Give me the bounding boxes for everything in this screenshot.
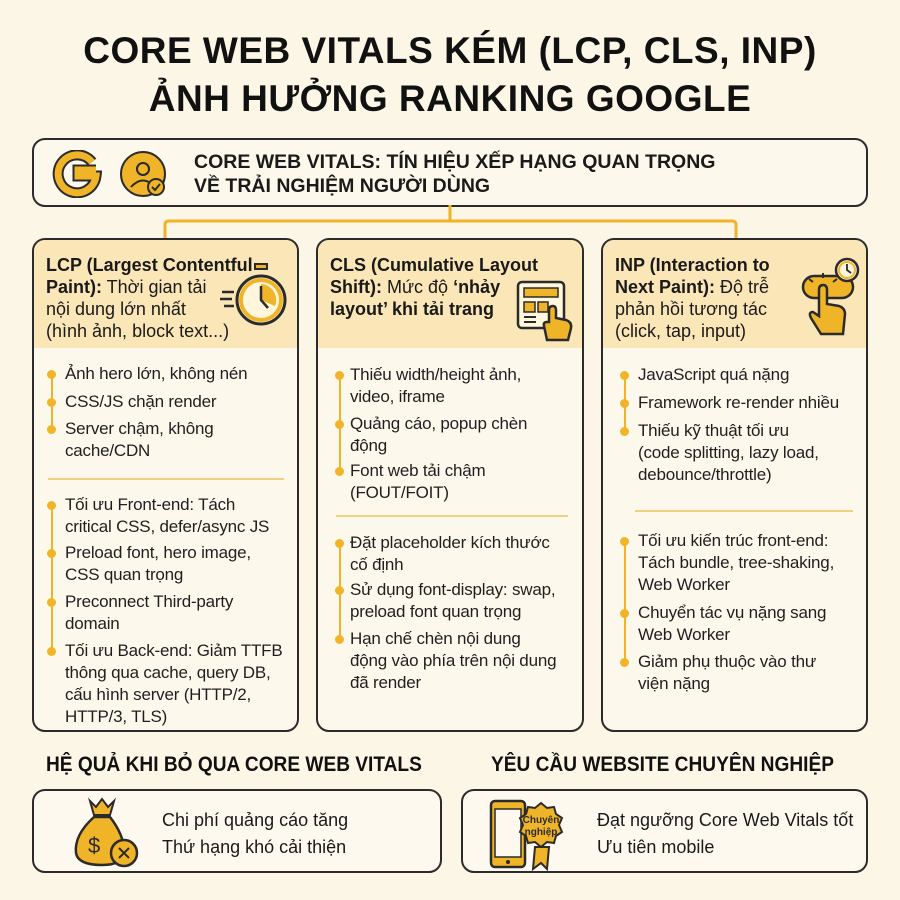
top banner: [32, 138, 868, 207]
panel: INP: Chuyển tác vụ nặng sang: [638, 603, 826, 622]
panel: INP: [601, 238, 868, 732]
banner text: CORE WEB VITALS: TÍN HIỆU XẾP HẠNG QUAN TRỌNG: [194, 151, 715, 173]
INP heading: Next Paint): Độ trễ: [615, 277, 769, 297]
title: [83, 30, 817, 119]
panel: requirements: [461, 789, 868, 873]
consequences text: Chi phí quảng cáo tăng: [162, 810, 348, 830]
panel: LCP: [32, 238, 299, 732]
CLS solutions: [335, 533, 556, 692]
LCP heading: LCP (Largest Contentful: [46, 255, 253, 275]
LCP causes: [47, 364, 247, 460]
panel: INP: debounce/throttle): [638, 465, 771, 484]
heading: requirements: YÊU CẦU WEBSITE CHUYÊN NGHIỆP: [491, 753, 834, 776]
INP heading: [615, 255, 770, 341]
icon: phone with badge: nghiệp: [525, 827, 557, 838]
INP heading: INP (Interaction to: [615, 255, 770, 275]
title: CORE WEB VITALS KÉM (LCP, CLS, INP): [83, 30, 817, 71]
consequences text: Thứ hạng khó cải thiện: [162, 837, 346, 857]
requirements text: Đạt ngưỡng Core Web Vitals tốt: [597, 810, 853, 830]
panel: LCP: CSS/JS chặn render: [65, 392, 216, 411]
panel: INP: (code splitting, lazy load,: [638, 443, 819, 462]
panel: LCP: Preconnect Third-party: [65, 592, 233, 611]
panel: INP: Tách bundle, tree-shaking,: [638, 553, 834, 572]
panel: CLS: Thiếu width/height ảnh,: [350, 365, 521, 384]
panel: LCP: cache/CDN: [65, 441, 150, 460]
INP heading: phản hồi tương tác: [615, 299, 767, 319]
panel: LCP: Preload font, hero image,: [65, 543, 251, 562]
panel: LCP: Ảnh hero lớn, không nén: [65, 364, 247, 383]
CLS heading: Shift): Mức độ ‘nhảy: [330, 277, 500, 297]
banner text: [194, 150, 715, 197]
panel: INP: Web Worker: [638, 575, 730, 594]
CLS heading: CLS (Cumulative Layout: [330, 255, 538, 275]
icon: money bag: [74, 798, 138, 868]
panel: CLS: Font web tải chậm: [350, 461, 486, 480]
panel: consequences: [32, 789, 442, 873]
panel: INP: Framework re-render nhiều: [638, 393, 839, 412]
panel: CLS: đã render: [350, 673, 421, 692]
icon: user circle: [120, 151, 166, 197]
panel: CLS: Đặt placeholder kích thước: [350, 533, 550, 552]
panel: CLS: [316, 238, 584, 732]
panel: LCP: Tối ưu Front-end: Tách: [65, 495, 235, 514]
CLS heading: layout’ khi tải trang: [330, 299, 494, 319]
panel: LCP: CSS quan trọng: [65, 565, 183, 584]
panel: INP: viện nặng: [638, 674, 710, 693]
panel: CLS: Sử dụng font-display: swap,: [350, 580, 555, 599]
banner text: VỀ TRẢI NGHIỆM NGƯỜI DÙNG: [194, 175, 490, 197]
panel: CLS: cố định: [350, 555, 403, 574]
CLS heading: [330, 255, 538, 319]
panel: LCP: domain: [65, 614, 120, 633]
connector lines: [164, 205, 738, 238]
panel: LCP: thông qua cache, query DB,: [65, 663, 271, 682]
panel: LCP: cấu hình server (HTTP/2,: [65, 685, 251, 704]
LCP heading: [46, 255, 253, 341]
panel: CLS: động vào phía trên nội dung: [350, 651, 556, 670]
CLS causes: [335, 365, 527, 502]
panel: CLS: động: [350, 436, 387, 455]
icon: layout with hand: [516, 280, 572, 342]
icon: stopwatch: [220, 263, 286, 326]
LCP heading: Paint): Thời gian tải: [46, 277, 207, 297]
panel: CLS: preload font quan trọng: [350, 602, 521, 621]
LCP heading: nội dung lớn nhất: [46, 299, 186, 319]
title: ẢNH HƯỞNG RANKING GOOGLE: [149, 78, 751, 119]
panel: LCP: Server chậm, không: [65, 419, 214, 438]
INP causes: [620, 365, 839, 484]
panel: INP: Giảm phụ thuộc vào thư: [638, 652, 816, 671]
panel: CLS: Hạn chế chèn nội dung: [350, 629, 521, 648]
panel: LCP: HTTP/3, TLS): [65, 707, 167, 726]
panel: CLS: (FOUT/FOIT): [350, 483, 449, 502]
panel: CLS: video, iframe: [350, 387, 445, 406]
panel: INP: Web Worker: [638, 625, 730, 644]
INP solutions: [620, 531, 834, 693]
panel: INP: Tối ưu kiến trúc front-end:: [638, 531, 828, 550]
panel: INP: Thiếu kỹ thuật tối ưu: [638, 421, 789, 440]
consequences text: [162, 810, 348, 857]
icon: money bag: $: [88, 833, 100, 858]
requirements text: Ưu tiên mobile: [597, 837, 714, 857]
INP heading: (click, tap, input): [615, 321, 746, 341]
requirements text: [597, 810, 854, 857]
panel: LCP: critical CSS, defer/async JS: [65, 517, 269, 536]
panel: CLS: Quảng cáo, popup chèn: [350, 414, 527, 433]
icon: tap button: [802, 258, 860, 336]
LCP heading: (hình ảnh, block text...): [46, 321, 229, 341]
panel: INP: JavaScript quá nặng: [638, 365, 789, 384]
heading: consequences: HỆ QUẢ KHI BỎ QUA CORE WEB VITALS: [46, 753, 422, 776]
LCP solutions: [47, 495, 282, 726]
icon: phone with badge: Chuyên: [523, 815, 559, 826]
panel: LCP: Tối ưu Back-end: Giảm TTFB: [65, 641, 282, 660]
icon: google G: [52, 150, 102, 198]
icon: phone with badge: [490, 800, 564, 871]
